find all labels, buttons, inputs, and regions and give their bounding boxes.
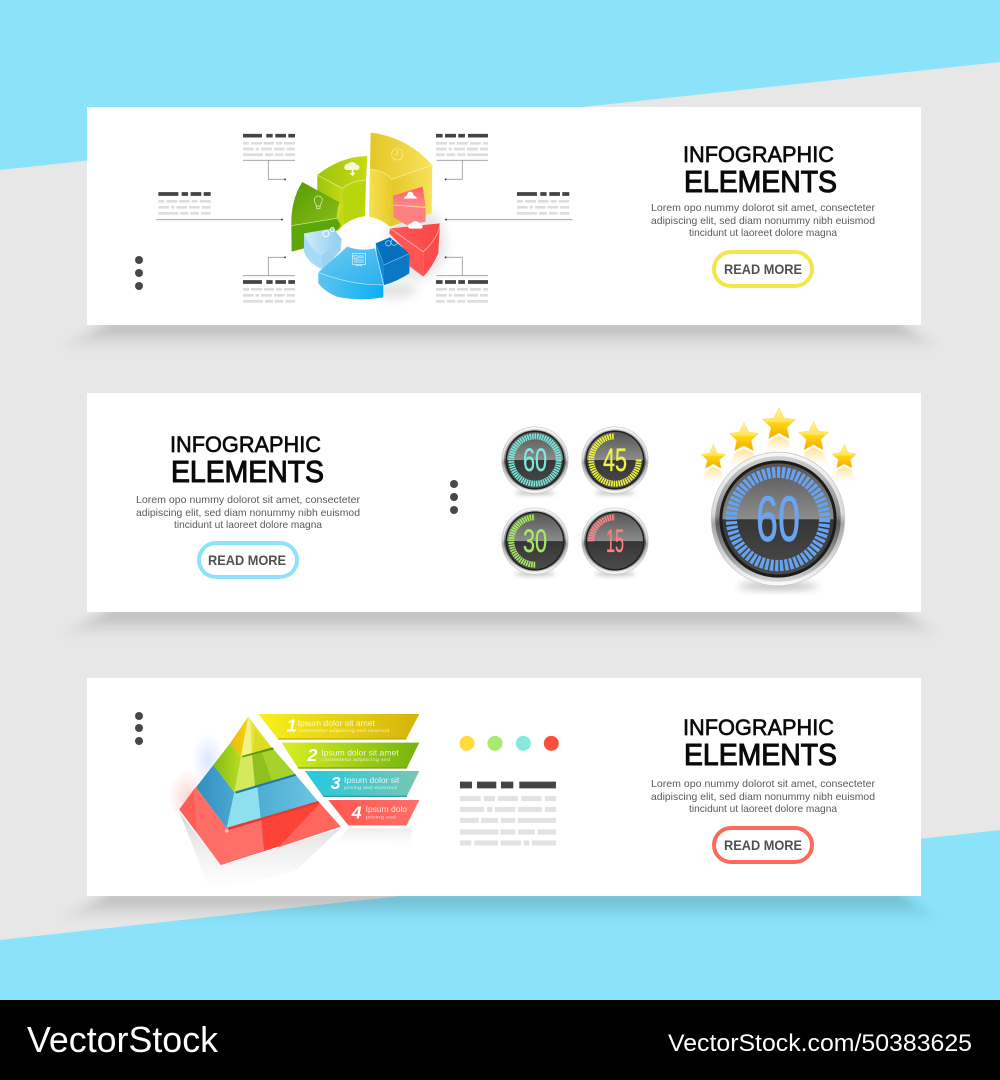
panel shadows [55,322,945,920]
button: read more [199,543,297,577]
callout text: middle right [445,194,573,221]
panel: pyramid banner [87,678,921,896]
heading [170,432,324,489]
ribbon 1: consectetur adipiscing sed eiusmod [298,728,390,734]
timer: 45 yellow [582,427,648,495]
heading: INFOGRAPHIC [170,432,321,457]
timer: 45 yellow: 45 [603,442,627,478]
body text: adipiscing elit, sed diam nonummy nibh euismod [136,507,360,519]
ribbon 3: 3 [331,773,341,793]
footer bar [0,1000,1000,1080]
ribbon 1 [258,714,419,740]
tier: yellow [230,717,272,757]
heading [683,142,837,199]
colour dots legend [459,736,559,751]
text placeholder block [460,785,556,843]
body text: Lorem opo nummy dolorot sit amet, consecteter [136,494,360,506]
body text: Lorem opo nummy dolorot sit amet, consecteter [651,202,875,214]
timer: large 60 blue [711,452,845,589]
tier: red [179,787,341,865]
body text: adipiscing elit, sed diam nonummy nibh euismod [651,791,875,803]
ribbon 3: Ipsum dolor sit [344,776,400,785]
body text: tincidunt ut laoreet dolore magna [174,519,322,531]
star reflections [702,436,856,482]
heading: INFOGRAPHIC [683,715,834,740]
ribbon 4: 4 [351,802,362,822]
timer: 15 red: 15 [606,523,624,559]
ribbon 4 [328,800,419,825]
callout text: bottom left [243,256,295,301]
timer: 30 green: 30 [523,523,547,559]
callout text: bottom right [436,256,488,301]
timer: large 60 blue: 60 [756,483,800,555]
heading: ELEMENTS [684,737,837,772]
segment: red [389,221,440,277]
segment: pale blue [304,228,342,269]
button: read more [714,828,812,862]
segment: light green [317,156,367,231]
heading [683,715,837,772]
ribbon 4: Ipsum dolo [366,805,408,814]
footer logo: VectorStock [27,1019,219,1060]
tier: green [213,743,295,792]
body text: adipiscing elit, sed diam nonummy nibh euismod [651,215,875,227]
body text [651,202,875,239]
segment: yellow [369,133,432,227]
panel: timers banner [87,393,921,612]
timer: 60 teal [502,427,568,495]
menu dots [135,712,143,745]
ribbon 2: 2 [306,745,317,765]
segment: pink [393,187,426,225]
timer: 60 teal: 60 [523,442,547,478]
tier: blue [196,765,318,828]
body text [136,494,360,531]
body text: tincidunt ut laoreet dolore magna [689,803,837,815]
segment: dark green [291,182,341,252]
panel: pie chart banner [87,107,921,325]
timer: 30 green [502,508,568,576]
ribbon 2 [282,743,419,769]
body text: tincidunt ut laoreet dolore magna [689,227,837,239]
segment: dark blue [376,237,410,285]
star rating [701,407,857,482]
callout text: top left [243,136,295,180]
body text: Lorem opo nummy dolorot sit amet, consecteter [651,778,875,790]
button: read more [714,252,812,286]
ribbon 3 [305,771,419,797]
ribbon 2: Ipsum dolor sit amet [321,748,399,757]
segment: sky blue [318,247,383,299]
stars [701,407,857,468]
ribbon 3: pricing sed eiusmod [344,785,397,791]
ribbon 2: consectetur adipiscing sed [321,757,390,763]
menu dots [135,256,143,290]
button: read more: READ MORE [724,261,802,277]
body text [651,778,875,815]
ribbon 1: 1 [287,716,297,736]
heading: ELEMENTS [684,164,837,199]
heading: INFOGRAPHIC [683,142,834,167]
callout text: top right [436,136,488,180]
timer: 15 red [582,508,648,576]
pyramid [168,714,559,890]
button: read more: READ MORE [724,837,802,853]
button: read more: READ MORE [208,552,286,568]
ribbon 4: pricing sed [366,814,396,820]
heading: ELEMENTS [171,454,324,489]
3D segmented ring chart [156,133,573,301]
menu dots [450,480,458,514]
footer url: VectorStock.com/50383625 [668,1030,972,1057]
callout text: middle left [156,194,283,221]
ribbon 1: Ipsum dolor sit amet [298,719,376,728]
